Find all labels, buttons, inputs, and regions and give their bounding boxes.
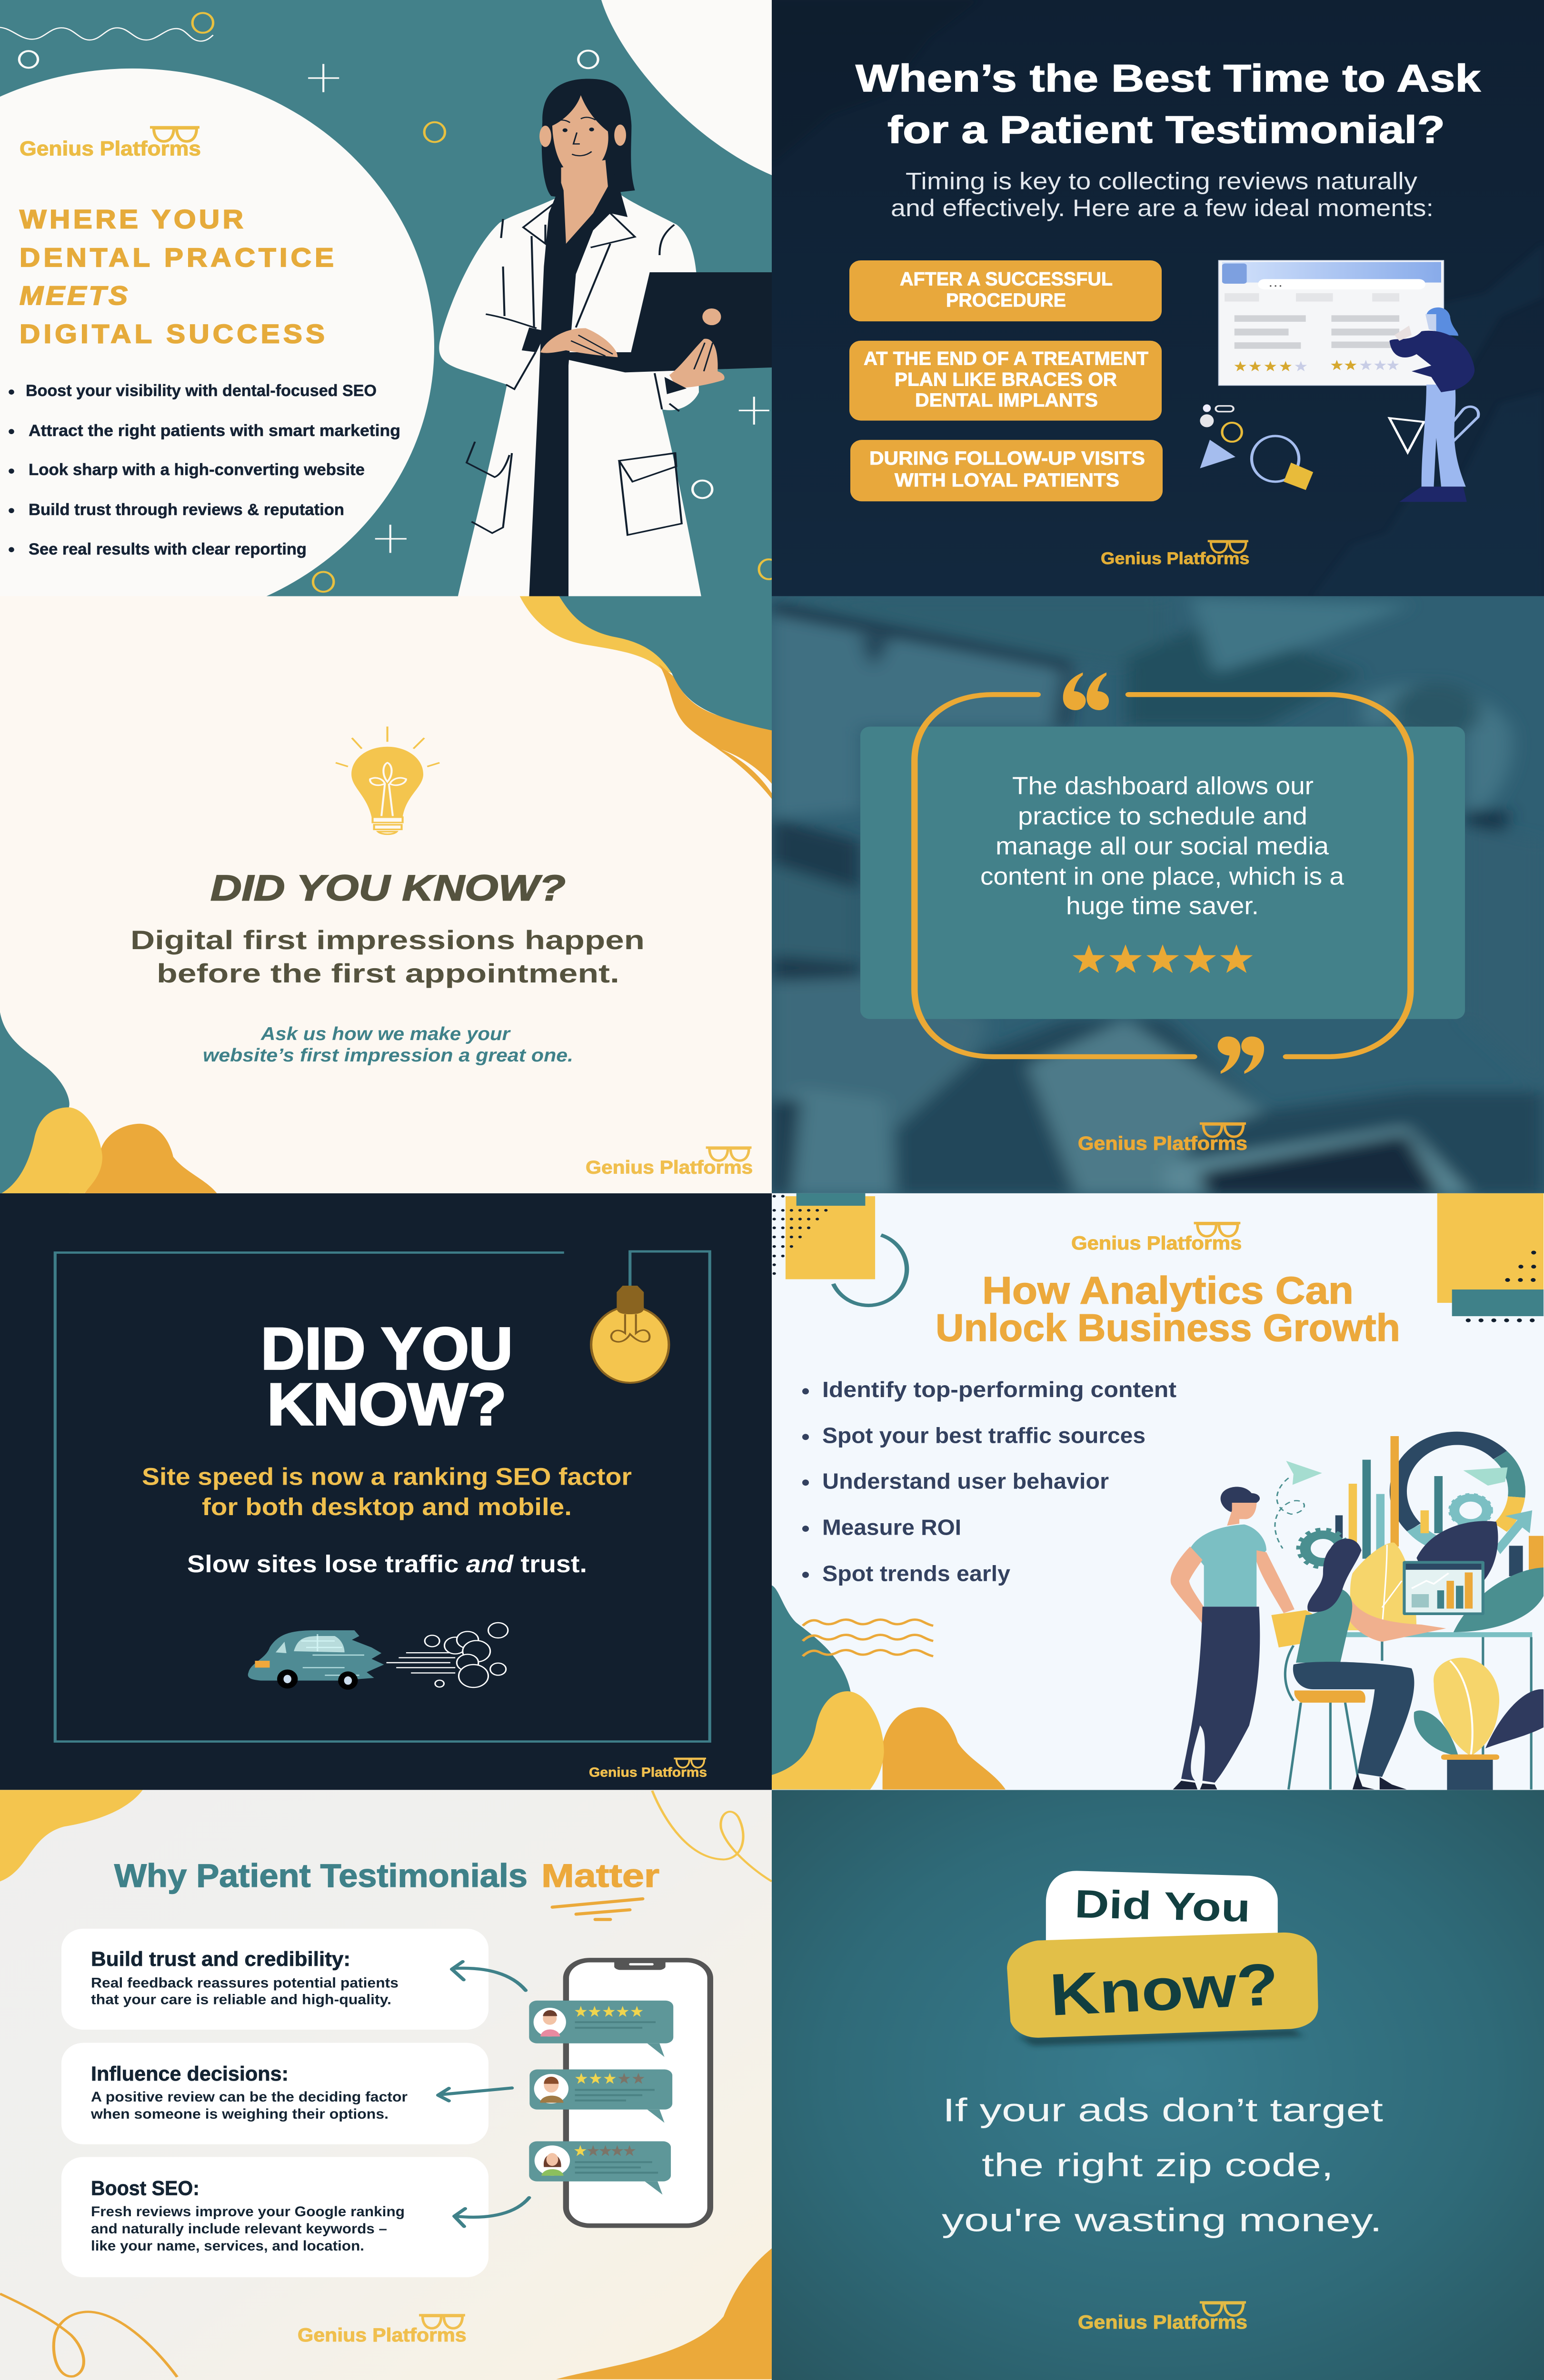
panel: best time to ask for a testimonial [772, 0, 1544, 597]
site speed fact: for both desktop and mobile. [202, 1494, 572, 1520]
call to action: website’s first impression a great one. [203, 1045, 573, 1066]
testimonial text: huge time saver. [1066, 892, 1259, 920]
panel 1 background [0, 0, 772, 596]
logo: Genius Platforms [1078, 1123, 1247, 1154]
subtitle: Timing is key to collecting reviews naturally [906, 168, 1417, 195]
fact text: If your ads don’t target [943, 2092, 1383, 2129]
bullet list of benefits: See real results with clear reporting [29, 540, 307, 558]
logo: Genius Platforms [20, 127, 201, 160]
illustration: review window with woman and shapes [1200, 260, 1478, 502]
logo: Genius Platforms [589, 1758, 707, 1780]
panel 2 background [772, 0, 1544, 596]
heading: When’s the Best Time to Ask [856, 56, 1481, 99]
site speed fact: Site speed is now a ranking SEO factor [142, 1463, 632, 1490]
white circle [0, 69, 434, 625]
card: build trust [61, 1929, 488, 2030]
card: boost SEO: and naturally include relevant keywords – [91, 2221, 387, 2237]
button: after a successful procedure [849, 260, 1162, 321]
heading: did you know: DID YOU KNOW? [210, 868, 566, 908]
button: follow-up visits: DURING FOLLOW-UP VISITS [869, 447, 1145, 468]
panel: did you know site speed [0, 1193, 772, 1790]
panel 3 background [0, 596, 772, 1193]
subtitle [891, 168, 1434, 221]
fact text: you're wasting money. [942, 2202, 1382, 2239]
logo: Genius Platforms: Genius Platforms [20, 138, 201, 160]
illustration: speeding car with smoke [248, 1623, 508, 1690]
logo: Genius Platforms [586, 1148, 753, 1178]
card: influence decisions: Influence decisions: [91, 2063, 289, 2085]
heading: where your dental practice meets digital success: DENTAL PRACTICE [20, 243, 334, 272]
slow sites statement: Slow sites lose traffic and trust. [187, 1551, 587, 1577]
logo: Genius Platforms: Genius Platforms [298, 2324, 467, 2345]
card: influence decisions [61, 2043, 488, 2144]
fact text: the right zip code, [982, 2148, 1334, 2183]
hand drawn underline [552, 1899, 643, 1919]
site speed fact [142, 1463, 632, 1520]
bullet list: Measure ROI [822, 1515, 961, 1540]
panel 5 background [0, 1193, 772, 1790]
card: build trust: Build trust and credibility: [91, 1948, 350, 1971]
decorative rings, crosses and wave [0, 13, 778, 592]
logo: Genius Platforms: Genius Platforms [1101, 549, 1249, 568]
panel: did you know zip code [772, 1790, 1544, 2380]
logo: Genius Platforms: Genius Platforms [1071, 1232, 1242, 1254]
button: end of treatment plan: DENTAL IMPLANTS [915, 390, 1098, 411]
testimonial text [980, 772, 1344, 920]
organic corner blobs [0, 595, 772, 1194]
five star rating [1073, 944, 1253, 973]
heading: where your dental practice meets digital success [20, 205, 334, 349]
illustration: team analysing charts [1171, 1436, 1544, 1790]
fact text [130, 926, 645, 989]
bullet list: Spot your best traffic sources [822, 1423, 1146, 1448]
logo: Genius Platforms [1078, 2302, 1247, 2333]
icon: lightbulb [336, 726, 439, 834]
card: boost SEO: Boost SEO: [91, 2177, 199, 2200]
bullet list of benefits: Look sharp with a high-converting website [29, 460, 365, 479]
panel 4 background [772, 596, 1544, 1193]
bullet list of benefits: Build trust through reviews & reputation [29, 500, 344, 519]
heading: how analytics can unlock business growth: Unlock Business Growth [936, 1306, 1400, 1349]
card: build trust: that your care is reliable and high-quality. [91, 1992, 391, 2007]
testimonial text: practice to schedule and [1018, 803, 1307, 830]
panel: where your dental practice meets digital success [0, 0, 778, 625]
bullet list: Understand user behavior [822, 1469, 1109, 1494]
heading: why patient testimonials matter: Why Patient Testimonials [114, 1858, 528, 1894]
gold quote frame with marks [915, 673, 1411, 1074]
illustration: phone with review bubbles and arrows [438, 1960, 710, 2226]
illustration: doctor with laptop [439, 79, 772, 597]
testimonial text: The dashboard allows our [1012, 772, 1314, 800]
heading: where your dental practice meets digital success: MEETS [20, 281, 128, 311]
call to action [203, 1023, 573, 1066]
card: boost SEO: Fresh reviews improve your Google ranking [91, 2203, 405, 2220]
sticker text: know: Know? [1048, 1951, 1280, 2028]
card: boost SEO [61, 2157, 488, 2277]
heading: where your dental practice meets digital success: DIGITAL SUCCESS [20, 319, 325, 349]
decorative corner shapes [772, 1192, 1544, 1789]
bullet list: Identify top-performing content [822, 1378, 1176, 1402]
heading accent word: Matter [541, 1858, 659, 1894]
heading: how analytics can unlock business growth [936, 1269, 1400, 1349]
panel 7 background [0, 1790, 772, 2380]
blurred photo background [772, 597, 1544, 1194]
card: influence decisions: when someone is weighing their options. [90, 2106, 388, 2122]
button: follow-up visits [850, 440, 1163, 501]
sticker text: did you: Did You [1074, 1882, 1251, 1930]
button: end of treatment plan: PLAN LIKE BRACES OR [895, 369, 1117, 390]
heading [856, 56, 1481, 151]
panel: did you know digital first impressions [0, 595, 772, 1194]
heading: did you know [261, 1315, 513, 1438]
testimonial text: content in one place, which is a [980, 863, 1344, 890]
bullet list of benefits [9, 381, 400, 558]
heading: where your dental practice meets digital success: WHERE YOUR [20, 205, 243, 234]
panel: testimonial quote [772, 596, 1544, 1194]
bullet list [802, 1378, 1176, 1586]
heading: how analytics can unlock business growth: How Analytics Can [982, 1269, 1354, 1312]
bullet list of benefits: Attract the right patients with smart marketing [29, 421, 400, 440]
panel 6 background [772, 1193, 1544, 1790]
button: follow-up visits: WITH LOYAL PATIENTS [895, 469, 1119, 491]
bullet list: Spot trends early [822, 1561, 1010, 1586]
button: after a successful procedure: PROCEDURE [946, 289, 1066, 310]
button: after a successful procedure: AFTER A SUCCESSFUL [900, 268, 1113, 289]
panel: why patient testimonials matter [0, 1790, 772, 2380]
logo: Genius Platforms: Genius Platforms [586, 1157, 753, 1178]
fact text: Digital first impressions happen [130, 926, 645, 955]
logo: Genius Platforms: Genius Platforms [1078, 1133, 1247, 1154]
heading: for a Patient Testimonial? [887, 108, 1445, 151]
card: boost SEO: like your name, services, and location. [91, 2238, 364, 2254]
call to action: Ask us how we make your [260, 1023, 511, 1044]
logo: Genius Platforms: Genius Platforms [1078, 2312, 1247, 2333]
fact text: before the first appointment. [157, 959, 619, 989]
faint background texture [772, 0, 1544, 597]
organic corner shapes and curls [0, 1790, 772, 2379]
button: end of treatment plan: AT THE END OF A TREATMENT [864, 348, 1148, 369]
logo: Genius Platforms [298, 2315, 467, 2345]
heading: did you know: DID YOU [261, 1315, 513, 1382]
fact text [942, 2092, 1383, 2239]
white corner shape [601, 0, 772, 175]
panel 8 background [772, 1790, 1544, 2380]
button: end of treatment plan [849, 341, 1162, 421]
sticker shapes: did you know [1007, 1871, 1318, 2046]
heading: did you know: KNOW? [267, 1371, 507, 1438]
teal frame and hanging bulb [55, 1251, 710, 1742]
testimonial text: manage all our social media [996, 833, 1329, 860]
panel: how analytics can unlock growth [772, 1192, 1544, 1790]
bullet list of benefits: Boost your visibility with dental-focused SEO [26, 381, 377, 400]
logo: Genius Platforms: Genius Platforms [589, 1765, 707, 1780]
card: influence decisions: A positive review can be the deciding factor [91, 2089, 408, 2105]
card: build trust: Real feedback reassures potential patients [91, 1975, 398, 1991]
subtitle: and effectively. Here are a few ideal moments: [891, 195, 1434, 221]
quote card [860, 726, 1465, 1019]
